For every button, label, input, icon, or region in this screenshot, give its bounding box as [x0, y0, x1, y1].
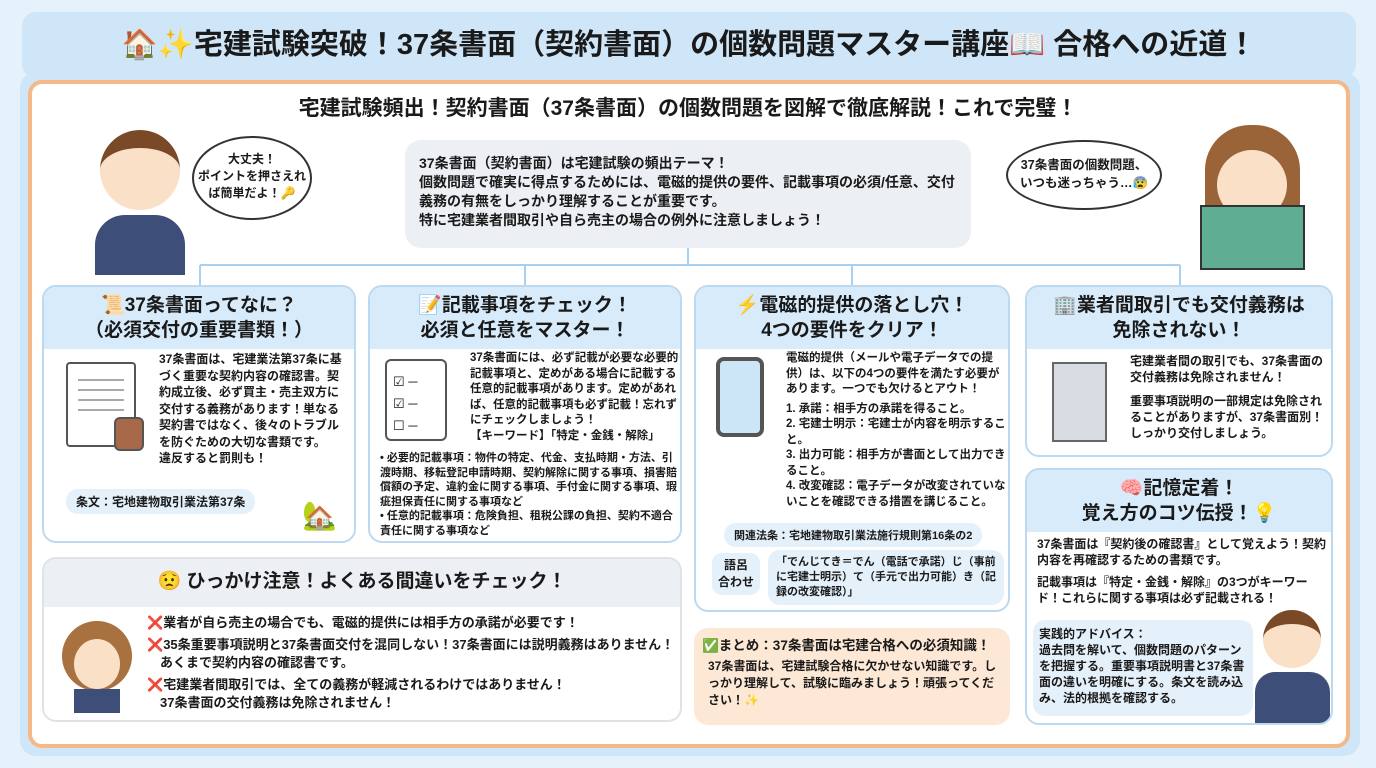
card 2: • 任意的記載事項：危険負担、租税公課の負担、契約不適合責任に関する事項など [380, 510, 673, 536]
card 4: 免除されない！ [1112, 320, 1246, 341]
card 1: 違反すると罰則も！ [159, 451, 267, 465]
character: teacher left [95, 130, 185, 275]
intro box [405, 140, 971, 248]
card 3: 2. 宅建士明示：宅建士が内容を明示すること。 [786, 418, 1006, 446]
card 3: 4. 改変確認：電子データが改変されていないことを確認できる措置を講じること。 [786, 480, 1005, 508]
card 4: 🏢業者間取引でも交付義務は [1053, 295, 1305, 316]
card 2: 📝記載事項をチェック！ [418, 295, 632, 316]
speech bubble right: いつも迷っちゃう…😰 [1020, 176, 1148, 190]
card 1: 条文：宅地建物取引業法第37条 [76, 495, 245, 509]
card 1: 📜37条書面ってなに？ [101, 295, 297, 316]
intro box: 37条書面（契約書面）は宅建試験の頻出テーマ！ [419, 155, 729, 171]
card 1: （必須交付の重要書類！） [85, 320, 313, 341]
icon: clipboard: ☐ ─ [393, 418, 417, 433]
card 5 [1025, 468, 1333, 725]
panel: common mistakes: 37条書面の交付義務は免除されません！ [160, 695, 395, 710]
card 2: 37条書面には、必ず記載が必要な必要的記載事項と、定めがある場合に記載する任意的記載事項があります。定めがあれば、任意的記載事項も必ず記載！忘れずにチェックしましょう！ [470, 352, 678, 426]
card 1 [42, 285, 356, 543]
card 4: 宅建業者間の取引でも、37条書面の交付義務は免除されません！ 重要事項説明の一部規定は免除されることがありますが、37条書面別！しっかり交付しましょう。 [1130, 354, 1323, 440]
speech bubble right: 37条書面の個数問題、 [1021, 158, 1147, 172]
character: student right [1200, 125, 1305, 270]
title bar [22, 12, 1356, 78]
card 3: 「でんじてき＝でん（電話で承諾）じ（事前に宅建士明示）て（手元で出力可能）き（記録の改変確認）」 [776, 556, 996, 598]
mnemonic: 合わせ [718, 575, 754, 589]
icon: smartphone [716, 357, 764, 437]
icon: building [1052, 362, 1107, 442]
intro box: 特に宅建業者間取引や自ら売主の場合の例外に注意しましょう！ [419, 212, 825, 228]
card 4 [1025, 285, 1333, 457]
card 2: 必須と任意をマスター！ [420, 320, 630, 341]
card 3: 3. 出力可能：相手方が書面として出力できること。 [786, 449, 1005, 476]
card 3: 4つの要件をクリア！ [761, 320, 943, 341]
connector lines [199, 248, 1181, 285]
panel: common mistakes: ❌業者が自ら売主の場合でも、電磁的提供には相手方の承諾が必要です！ ❌35条重要事項説明と37条書面交付を混同しない！37条書面には説明義務はありません！ [147, 615, 674, 652]
card 1: 37条書面は、宅建業法第37条に基づく重要な契約内容の確認書。契約成立後、必ず買主・売主双方に交付する義務があります！単なる契約書ではなく、後々のトラブルを防ぐための大切な書類です。 [159, 352, 342, 448]
card 5: 覚え方のコツ伝授！💡 [1082, 503, 1276, 524]
speech bubble right [1006, 140, 1162, 210]
character: confused girl [62, 621, 132, 713]
card 3 [694, 285, 1010, 612]
mnemonic [712, 553, 760, 595]
card 3: ⚡電磁的提供の落とし穴！ [736, 295, 968, 316]
icon: document & stamp [66, 362, 136, 447]
card 5: 過去問を解いて、個数問題のパターンを把握する。重要事項説明書と37条書面の違いを明確にする。条文を読み込み、法的根拠を確認する。 [1039, 643, 1244, 705]
icon: clipboard [385, 359, 447, 441]
intro box: 個数問題で確実に得点するためには、電磁的提供の要件、記載事項の必須/任意、交付義務の有無をしっかり理解することが重要です。 [419, 174, 955, 209]
card 3: 電磁的提供（メールや電子データでの提供）は、以下の4つの要件を満たす必要があります。一つでも欠けるとアウト！ 1. 承諾：相手方の承諾を得ること。 [786, 352, 999, 414]
icon: clipboard: ☑ ─ [393, 396, 417, 411]
panel: common mistakes: あくまで契約内容の確認書です。 ❌宅建業者間取引では、全ての義務が軽減されるわけではありません！ [147, 655, 566, 692]
speech bubble left [192, 136, 312, 220]
summary box: ✅まとめ：37条書面は宅建合格への必須知識！ [702, 638, 990, 653]
panel: common mistakes [42, 557, 682, 722]
icon: clipboard: ☑ ─ [393, 374, 417, 389]
card 1: 🏡 [302, 500, 337, 531]
card 5: 37条書面は『契約後の確認書』として覚えよう！契約内容を再確認するための書類です。 記載事項は『特定・金銭・解除』の3つがキーワード！これらに関する事項は必ず記載される！ [1037, 537, 1326, 605]
card 2: • 必要的記載事項：物件の特定、代金、支払時期・方法、引渡時期、移転登記申請時期、契約解除に関する事項、損害賠償額の予定、違約金に関する事項、手付金に関する事項、瑕疵担保責任に関する事項など [380, 452, 677, 508]
speech bubble left: ポイントを押さえれば簡単だよ！🔑 [198, 169, 306, 200]
speech bubble left: 大丈夫！ [228, 152, 276, 166]
panel: common mistakes: 😟 ひっかけ注意！よくある間違いをチェック！ [158, 571, 566, 592]
card 5: 実践的アドバイス： [1039, 627, 1147, 641]
card 5: 🧠記憶定着！ [1120, 478, 1238, 499]
character: teacher with certificate [1255, 610, 1330, 723]
card 3: 関連法条：宅地建物取引業法施行規則第16条の2 [734, 530, 972, 542]
card 2: 【キーワード】「特定・金銭・解除」 [470, 430, 660, 442]
summary box: 37条書面は、宅建試験合格に欠かせない知識です。しっかり理解して、試験に臨みましょう！頑張ってください！✨ [708, 659, 996, 707]
subtitle: 宅建試験頻出！契約書面（37条書面）の個数問題を図解で徹底解説！これで完璧！ [299, 97, 1077, 120]
mnemonic: 語呂 [724, 558, 748, 572]
card 2 [368, 285, 682, 543]
title bar: 🏠✨宅建試験突破！37条書面（契約書面）の個数問題マスター講座📖 合格への近道！ [122, 29, 1256, 61]
summary box [694, 628, 1010, 725]
